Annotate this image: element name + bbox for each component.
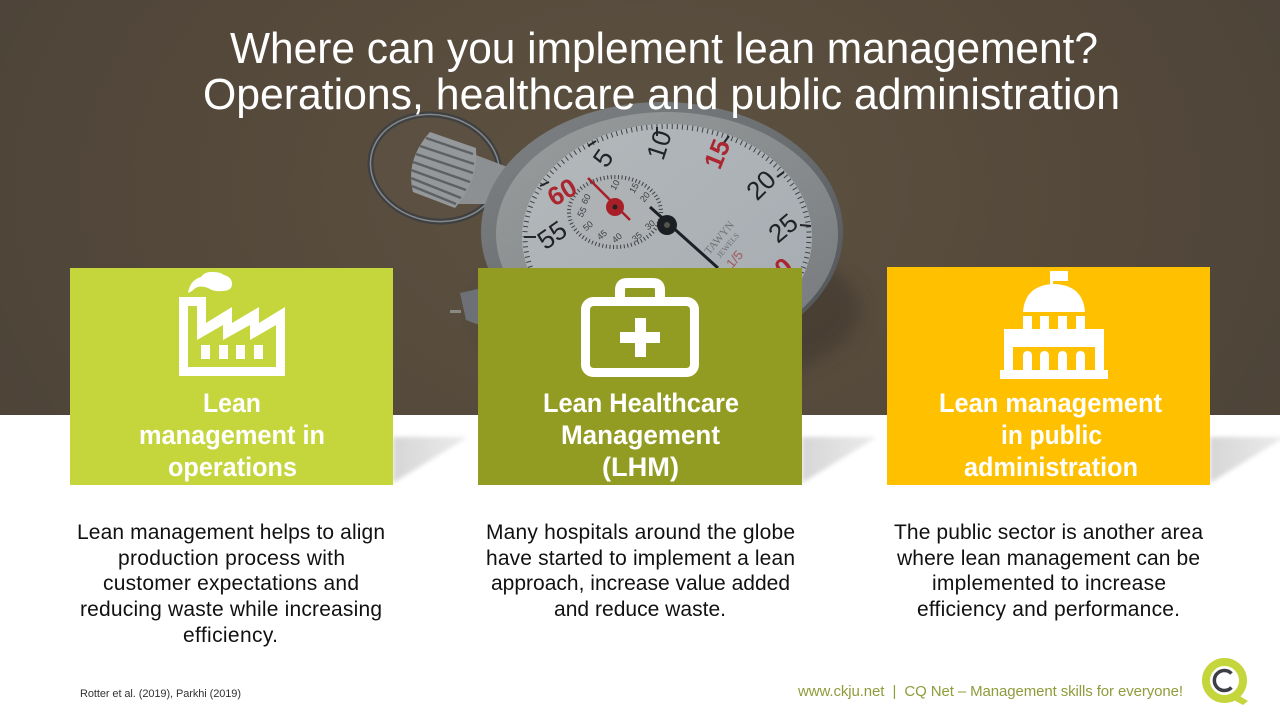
stopwatch ring bbox=[368, 112, 506, 224]
stopwatch pin bbox=[460, 289, 478, 324]
source citation: Rotter et al. (2019), Parkhi (2019) bbox=[80, 688, 241, 700]
sub-dial: 60 bbox=[579, 192, 593, 206]
major ticks bbox=[524, 127, 811, 237]
sub-dial: 30 bbox=[643, 218, 657, 232]
card heading: (LHM) bbox=[602, 452, 679, 482]
text block: public administration description: efficiency and performance. bbox=[917, 598, 1180, 621]
sub-dial: 40 bbox=[610, 231, 624, 245]
card heading: Management bbox=[561, 420, 720, 450]
sub-dial bbox=[567, 175, 663, 249]
stopwatch face: 15 bbox=[698, 135, 736, 173]
watch drop shadow bbox=[802, 272, 858, 366]
card shadows bbox=[393, 437, 1280, 483]
title bbox=[203, 24, 1120, 119]
icon: factory bbox=[179, 272, 285, 376]
card heading: Lean management bbox=[939, 388, 1162, 418]
icon: CQ logo bbox=[1206, 662, 1248, 705]
sub-dial hand bbox=[588, 178, 630, 220]
text block: operations description: customer expectations and bbox=[103, 572, 359, 595]
text block: healthcare description: Many hospitals around the globe bbox=[486, 521, 795, 544]
panel: lean management in public administration bbox=[887, 267, 1210, 485]
dial numbers: 5 bbox=[587, 143, 619, 173]
dial maker mark: TAWYN bbox=[703, 219, 737, 257]
dial maker mark: JEWELS bbox=[715, 231, 741, 260]
footer tagline: www.ckju.net | CQ Net – Management skills for everyone! bbox=[797, 683, 1183, 700]
stopwatch face: 60 bbox=[542, 172, 582, 212]
dial numbers: 55 bbox=[532, 214, 572, 256]
main hand bbox=[650, 207, 718, 268]
sub-dial: 10 bbox=[608, 178, 622, 192]
sub-dial: 55 bbox=[575, 205, 589, 219]
sub-dial: 35 bbox=[630, 230, 644, 244]
dial numbers: 10 bbox=[640, 127, 678, 163]
stopwatch face: 30 bbox=[757, 251, 799, 293]
text block: public administration description bbox=[894, 521, 1203, 621]
stopwatch face: 1/5 bbox=[723, 247, 746, 271]
card heading: in public bbox=[1001, 420, 1102, 450]
card heading: Lean bbox=[203, 388, 261, 418]
text block: operations description: production process with bbox=[118, 547, 345, 570]
dial numbers bbox=[536, 131, 797, 248]
stopwatch case bbox=[481, 102, 843, 314]
card heading bbox=[139, 388, 325, 482]
icon: government building bbox=[1000, 271, 1108, 379]
stopwatch face bbox=[522, 124, 812, 278]
sub-dial: 45 bbox=[595, 228, 609, 242]
stopwatch crown bbox=[411, 132, 476, 208]
icon: medical case bbox=[586, 283, 694, 372]
text block: public administration description: implemented to increase bbox=[932, 572, 1166, 595]
text block: healthcare description bbox=[486, 521, 795, 621]
dial numbers: 25 bbox=[762, 207, 804, 249]
panel: lean management in operations bbox=[70, 268, 393, 485]
text block: operations description bbox=[77, 521, 385, 647]
sub-dial: 20 bbox=[638, 190, 652, 204]
card heading: management in bbox=[139, 420, 325, 450]
sub-dial: 15 bbox=[627, 181, 641, 195]
title: Operations, healthcare and public administration bbox=[203, 70, 1120, 119]
card heading bbox=[543, 388, 739, 482]
panel: lean healthcare management bbox=[478, 268, 802, 485]
dial numbers: 20 bbox=[740, 164, 782, 206]
text block: public administration description: The public sector is another area bbox=[894, 521, 1203, 544]
title: Where can you implement lean management? bbox=[230, 24, 1098, 73]
background photo: stopwatch on wooden table bbox=[0, 0, 1280, 415]
stopwatch stem bbox=[458, 155, 506, 204]
text block: healthcare description: have started to implement a lean bbox=[486, 547, 795, 570]
text block: healthcare description: and reduce waste. bbox=[554, 598, 726, 621]
card heading: operations bbox=[168, 452, 297, 482]
card heading: Lean Healthcare bbox=[543, 388, 739, 418]
card heading: administration bbox=[964, 452, 1138, 482]
text block: operations description: Lean management helps to align bbox=[77, 521, 385, 544]
text block: public administration description: where lean management can be bbox=[896, 547, 1200, 570]
sub-dial: 50 bbox=[581, 219, 595, 233]
text block: operations description: reducing waste while increasing bbox=[80, 598, 382, 621]
card heading bbox=[939, 388, 1162, 482]
text block: operations description: efficiency. bbox=[183, 624, 278, 647]
text block: healthcare description: approach, increase value added bbox=[491, 572, 790, 595]
